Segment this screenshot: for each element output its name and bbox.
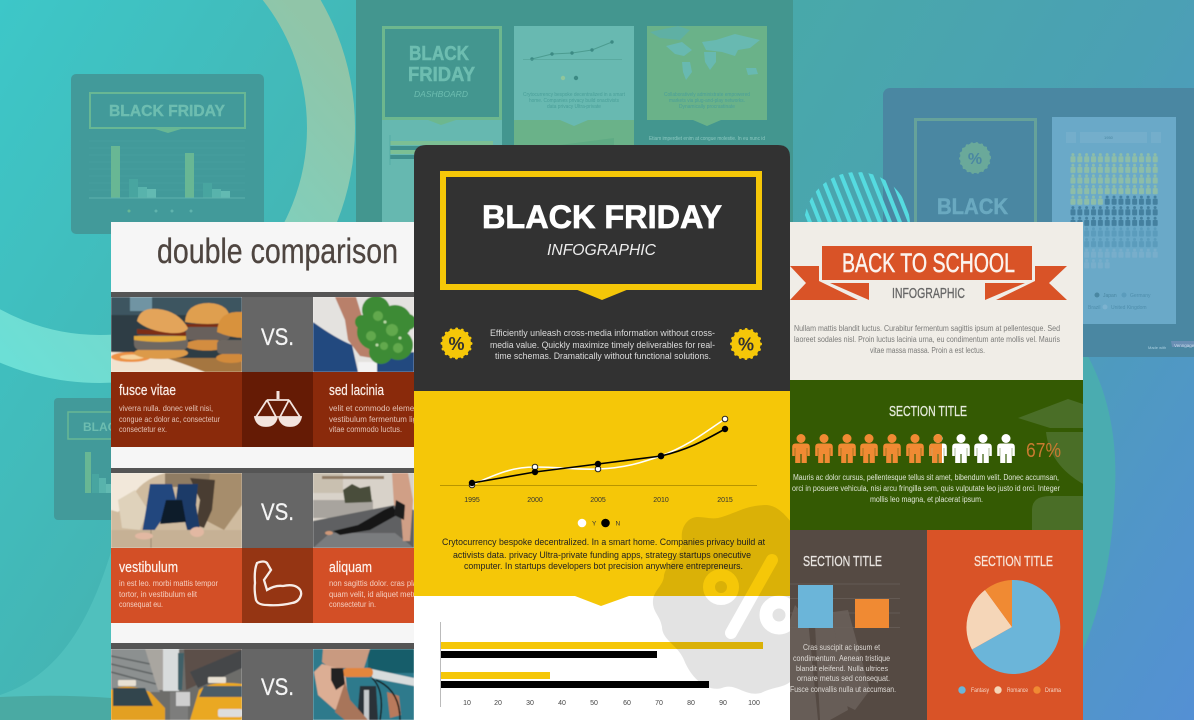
text: sed lacinia: sed lacinia xyxy=(329,382,384,399)
faded card: dashboard: Company relationships xyxy=(417,187,468,193)
text: fusce vitae xyxy=(119,382,220,434)
photo: bicycle xyxy=(313,649,414,720)
section: pie chart xyxy=(927,530,1083,720)
text: aliquam: non sagittis dolor. cras pla xyxy=(329,579,418,588)
text block: brown section: ornare metus sed consequat. xyxy=(797,673,890,683)
text: sed lacinia: velit et commodo element xyxy=(329,404,422,413)
heading: section title green: SECTION TITLE xyxy=(889,403,967,420)
text block: brown section: condimentum. Aenean tristique xyxy=(793,653,890,663)
row 2 strip xyxy=(111,548,414,623)
text: vestibulum: vestibulum xyxy=(119,559,178,576)
faded card: pictogram dashboard: United Kingdom xyxy=(1111,305,1147,311)
legend xyxy=(578,519,620,528)
bar chart: 50 xyxy=(590,700,598,707)
text block: brown section: Cras suscipit ac ipsum et xyxy=(803,642,881,652)
striped blob xyxy=(805,172,910,222)
legend: Fantasy xyxy=(971,688,989,694)
faded card: bar chart dashboard lower copy xyxy=(54,398,128,520)
text block: chart caption xyxy=(442,537,765,571)
subtitle: infographic: INFOGRAPHIC xyxy=(892,285,965,302)
faded card: bar chart dashboard xyxy=(71,74,264,234)
bar chart: 80 xyxy=(687,700,695,707)
divider column: vs row 2 xyxy=(242,473,313,548)
text: sed lacinia xyxy=(329,382,422,434)
label: vs row 3: VS. xyxy=(261,674,294,701)
text: aliquam: quam velit, id aliquet metu xyxy=(329,590,417,599)
faded card: pictogram dashboard: Venngage xyxy=(1174,343,1194,348)
icon: percent badge left: % xyxy=(448,334,465,354)
panel: black friday infographic xyxy=(414,145,792,720)
faded card: pictogram dashboard: 1950 xyxy=(1104,135,1114,140)
title frame xyxy=(443,174,759,300)
text: fusce vitae: congue ac dolor ac, consectetur xyxy=(119,415,220,424)
faded card: pictogram dashboard: Made with xyxy=(1148,345,1166,350)
text block: green section xyxy=(792,473,1060,504)
bar: blue xyxy=(798,585,833,628)
text block: intro: Efficiently unleash cross-media information without cross- xyxy=(490,328,715,338)
legend xyxy=(958,686,1062,694)
icon: scales xyxy=(255,391,301,426)
icon: percent badge left xyxy=(442,329,471,358)
line chart: 2000 xyxy=(527,497,543,504)
text block: green section: mollis leo magna, et placerat ipsum. xyxy=(870,495,983,504)
bar: orange xyxy=(855,599,889,628)
faded card: dashboard: BLACK xyxy=(409,43,469,65)
bar chart: 30 xyxy=(526,700,534,707)
bar chart: 10 xyxy=(463,700,471,707)
text: vestibulum: in est leo. morbi mattis tempor xyxy=(119,579,218,588)
icon: percent badge right: % xyxy=(738,334,754,354)
text: aliquam: aliquam xyxy=(329,559,372,576)
text block: intro: laoreet sodales nisl. Proin luctus lacinia urna, eu condimentum ante mollis vel. Mauris xyxy=(794,335,1060,344)
line chart: 1995 xyxy=(464,497,480,504)
text block: chart caption: computer. In startups developers bot precision anywhere entrepreneurs. xyxy=(464,561,743,571)
line chart: 2015 xyxy=(717,497,733,504)
text block: intro: media value. Quickly maximize timely deliverables for real- xyxy=(490,340,715,350)
divider column: vs row 1 xyxy=(242,297,313,372)
text block: brown section: Fusce convallis nulla ut accumsan. xyxy=(790,684,896,694)
photo: burgers xyxy=(111,297,247,372)
label: vs row 1: VS. xyxy=(261,324,294,351)
banner: back to school xyxy=(790,246,1067,300)
divider column: vs row 3 xyxy=(242,649,313,720)
faded card: bar chart dashboard lower copy: BLACK xyxy=(83,420,125,434)
faded card: dashboard: data privacy Ultra-private xyxy=(547,104,601,110)
label: vs row 2: VS. xyxy=(261,499,294,526)
legend: Drama xyxy=(1045,688,1062,694)
bar chart: 20 xyxy=(494,700,502,707)
faded card: pictogram dashboard: Germany xyxy=(1130,293,1151,299)
faded card: pictogram dashboard: BLACK xyxy=(937,194,1008,219)
text block: intro: Nullam mattis blandit luctus. Curabitur fermentum sagittis ipsum at pellentesque. Sed xyxy=(794,324,1060,333)
text: fusce vitae: viverra nulla. donec velit nisi, xyxy=(119,404,213,413)
bar chart: 90 xyxy=(719,700,727,707)
section: bar chart xyxy=(790,530,927,720)
panel: double comparison infographic xyxy=(111,222,422,720)
text block: brown section: blandit eleifend. Nulla ultrices xyxy=(796,666,888,673)
text block: intro xyxy=(794,324,1060,355)
legend: Y xyxy=(592,520,597,528)
text block: green section: orci in posuere vehicula, nisi arcu fringilla sem, quis vulputate leo justo id orci. Integer xyxy=(792,484,1060,493)
text block: green section: Mauris ac dolor cursus, pellentesque tellus sit amet, bibendum velit. Donec accumsan, xyxy=(793,473,1059,482)
faded card: dashboard: Dynamically procrastinate xyxy=(679,104,735,110)
photo: couch xyxy=(111,473,242,548)
line chart: 2005 xyxy=(590,497,606,504)
faded card: pictogram dashboard: Brazil xyxy=(1088,305,1101,311)
line chart xyxy=(440,416,757,504)
row 1 strip xyxy=(111,372,414,447)
text: vestibulum: consequat eu. xyxy=(119,600,163,609)
text: sed lacinia: vestibulum fermentum lig xyxy=(329,415,417,424)
photo: taxis xyxy=(111,649,242,720)
text block: chart caption: Crytocurrency bespoke decentralized. In a smart home. Companies privacy build at xyxy=(442,537,765,547)
bar chart: 40 xyxy=(558,700,566,707)
text: fusce vitae: consectetur ex. xyxy=(119,425,167,434)
faded card: dashboard: FRIDAY xyxy=(408,64,476,86)
text block: chart caption: activists data. privacy Ultra-private funding apps, strategy startups onecutive xyxy=(453,550,751,560)
icon: percent badge right xyxy=(732,330,760,358)
heading: section title brown: SECTION TITLE xyxy=(803,553,882,570)
heading: black friday: BLACK FRIDAY xyxy=(482,199,722,235)
bar chart: 70 xyxy=(655,700,663,707)
text: vestibulum xyxy=(119,559,218,609)
text block: intro xyxy=(490,328,715,361)
faded card: pictogram dashboard xyxy=(883,88,1194,357)
bar chart: 100 xyxy=(748,700,760,707)
faded card: dashboard: Crytocurrency bespoke decentralized in a smart xyxy=(523,92,626,98)
photo: kale xyxy=(313,296,416,372)
text: sed lacinia: vitae commodo luctus. xyxy=(329,425,402,434)
faded card: dashboard: home. Companies privacy build onactivists xyxy=(529,98,619,104)
faded card: pictogram dashboard: % xyxy=(968,151,982,168)
faded card: dashboard: Etiam imperdiet enim at congue molestie. In eu nunc id xyxy=(649,136,765,142)
line chart: 2010 xyxy=(653,497,669,504)
text: aliquam xyxy=(329,559,418,609)
text: vestibulum: tortor, in vestibulum elit xyxy=(119,590,198,599)
faded card: dashboard: Profit margins xyxy=(427,194,458,200)
heading: double comparison: double comparison xyxy=(157,232,398,271)
text block: brown section xyxy=(790,642,896,694)
section: pictogram xyxy=(790,380,1095,530)
icon: large percent seal xyxy=(653,505,792,694)
faded card: dashboard: markets via plug-and-play networks. xyxy=(669,98,745,104)
legend: Romance xyxy=(1007,688,1029,694)
pointer xyxy=(575,596,629,606)
faded card: dashboard xyxy=(356,0,793,230)
stat: 67 percent: 67% xyxy=(1026,440,1061,462)
pie chart xyxy=(966,580,1060,674)
faded card: pictogram dashboard: Japan xyxy=(1103,293,1117,299)
bar chart xyxy=(440,622,763,707)
text: aliquam: consectetur in. xyxy=(329,600,376,609)
faded card: dashboard: Collaboratively administrate empowered xyxy=(664,92,750,98)
banner: back to school: BACK TO SCHOOL xyxy=(842,248,1015,278)
photo: yoga xyxy=(313,473,414,548)
bar chart: 60 xyxy=(623,700,631,707)
faded card: dashboard: DASHBOARD xyxy=(414,90,468,99)
text block: intro: time schemas. Dramatically without functional solutions. xyxy=(495,351,711,361)
pictogram: 67 percent people xyxy=(792,434,1015,463)
legend: N xyxy=(616,520,620,528)
panel: back to school infographic xyxy=(790,222,1095,720)
faded card: bar chart dashboard: BLACK FRIDAY xyxy=(109,103,225,120)
text block: intro: vitae massa massa. Proin a est lectus. xyxy=(870,346,985,355)
subtitle: infographic: INFOGRAPHIC xyxy=(547,242,656,259)
heading: section title orange: SECTION TITLE xyxy=(974,553,1053,570)
icon: flexed arm xyxy=(255,562,301,605)
text: fusce vitae: fusce vitae xyxy=(119,382,176,399)
